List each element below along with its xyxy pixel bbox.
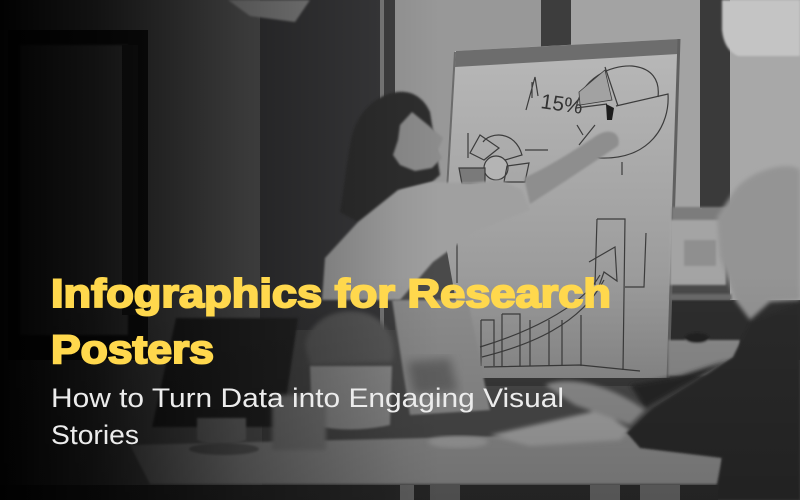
jacket xyxy=(627,303,800,500)
light laptop xyxy=(392,300,490,415)
flipchart drawings xyxy=(457,66,668,371)
plant xyxy=(305,311,393,365)
cup xyxy=(197,418,246,445)
marker xyxy=(606,104,614,120)
subtitle: How to Turn Data into Engaging Visual xyxy=(51,383,564,413)
seated person xyxy=(627,166,800,500)
dark laptop xyxy=(152,318,298,427)
pot xyxy=(310,366,392,430)
foreground laptop and plant xyxy=(152,300,490,455)
papers and hand xyxy=(490,360,730,446)
title: Infographics for Research xyxy=(51,272,611,316)
title xyxy=(51,272,611,372)
presenter xyxy=(322,92,619,300)
shirt xyxy=(322,180,530,300)
wall screen at left xyxy=(8,30,148,360)
table xyxy=(130,433,722,484)
face xyxy=(393,112,443,171)
hair xyxy=(340,92,440,222)
title: Posters xyxy=(51,328,214,372)
right desk items xyxy=(668,207,740,376)
flipchart drawings: 15% xyxy=(539,90,584,119)
arm xyxy=(524,132,619,204)
subtitle: Stories xyxy=(51,420,139,450)
flipchart xyxy=(445,39,679,386)
white mug xyxy=(272,395,326,450)
subtitle xyxy=(51,383,564,450)
hair xyxy=(717,166,800,320)
table legs xyxy=(0,485,718,500)
